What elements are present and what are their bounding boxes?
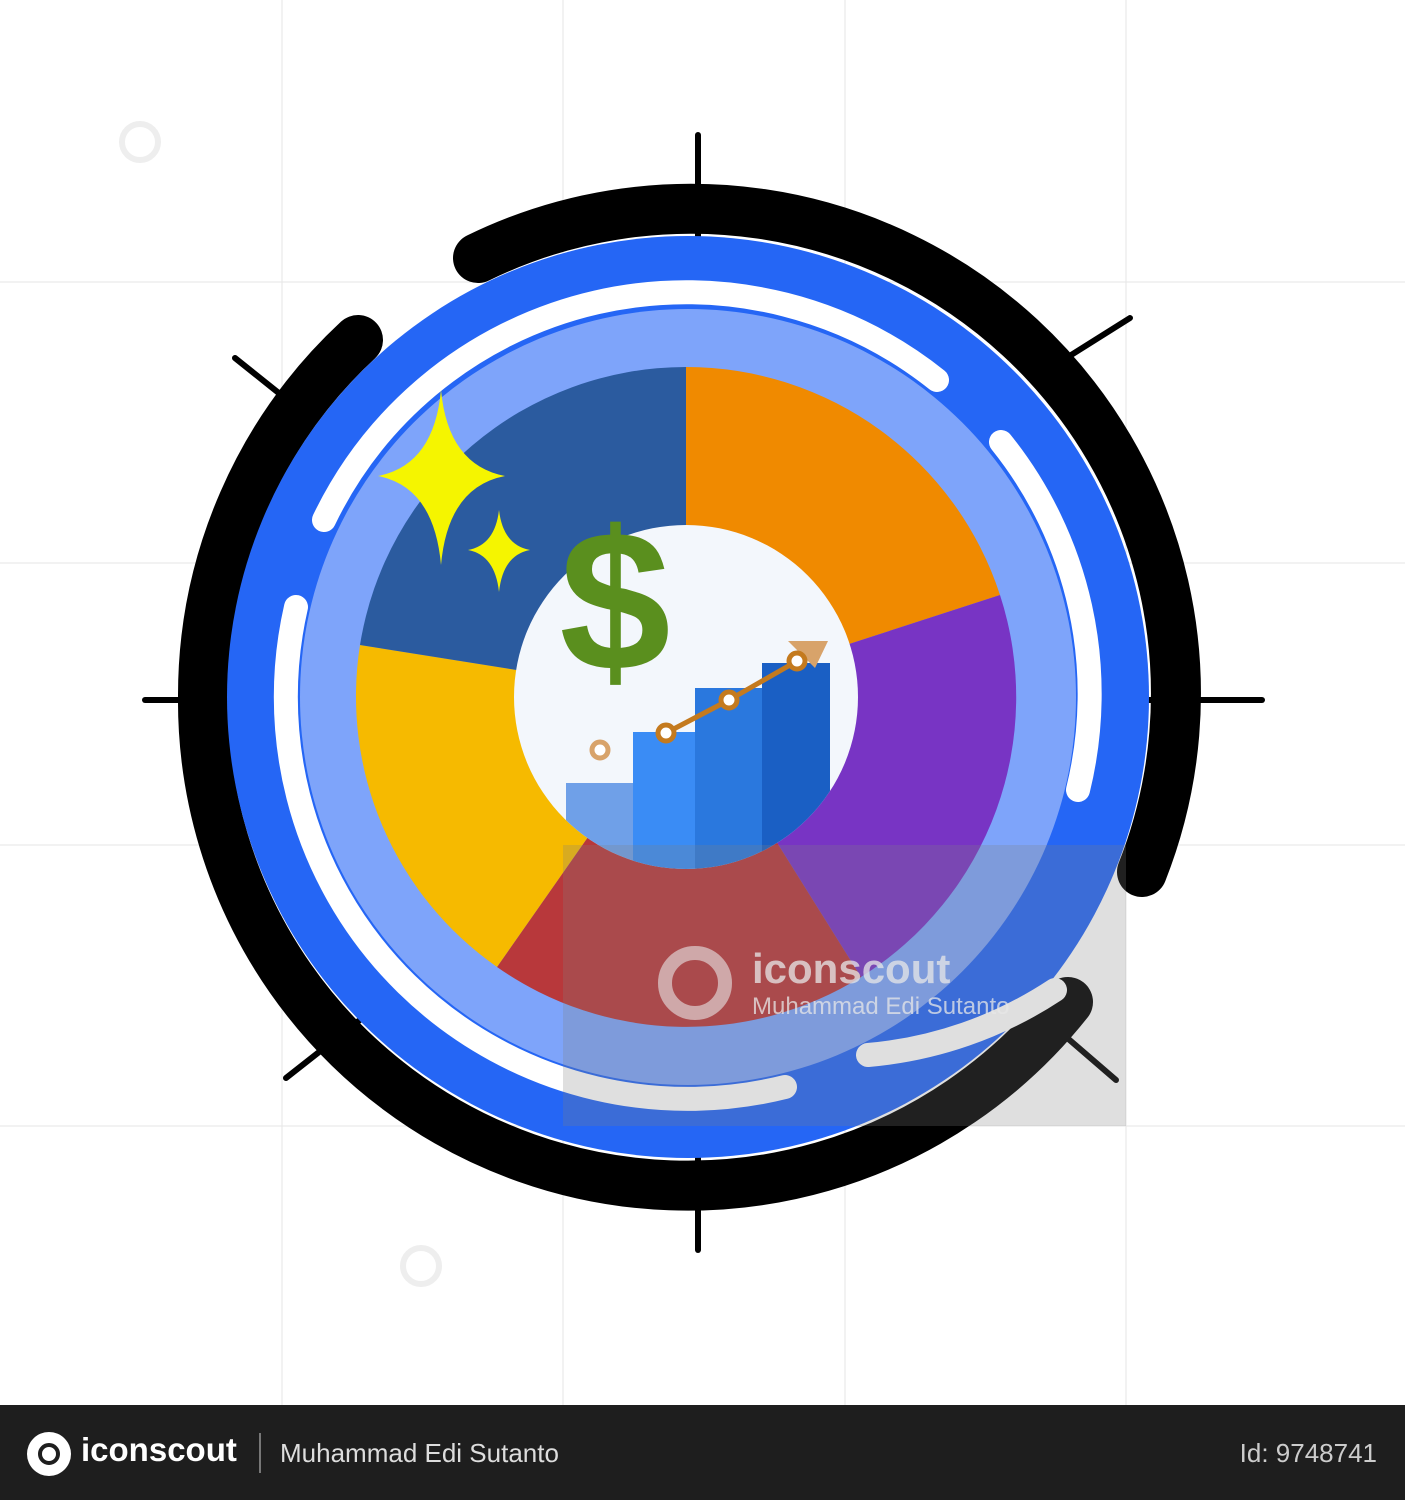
footer: Id: 9748741	[1240, 1438, 1377, 1468]
center disc	[514, 525, 858, 869]
white arcs	[286, 292, 1090, 1099]
ticks	[145, 135, 1262, 1250]
watermark: iconscout	[752, 945, 950, 992]
dollar sign: $	[559, 490, 671, 713]
footer: iconscout	[81, 1431, 237, 1468]
watermark: Muhammad Edi Sutanto	[752, 993, 1009, 1020]
watermark	[563, 845, 1126, 1126]
footer	[0, 1405, 1405, 1500]
sparkles	[378, 390, 530, 592]
pie chart	[356, 367, 1016, 1027]
blue ring	[227, 236, 1149, 1158]
outer black arcs	[203, 209, 1176, 1186]
footer: Muhammad Edi Sutanto	[280, 1438, 559, 1468]
bar chart	[566, 641, 830, 888]
light blue disc	[300, 309, 1076, 1085]
